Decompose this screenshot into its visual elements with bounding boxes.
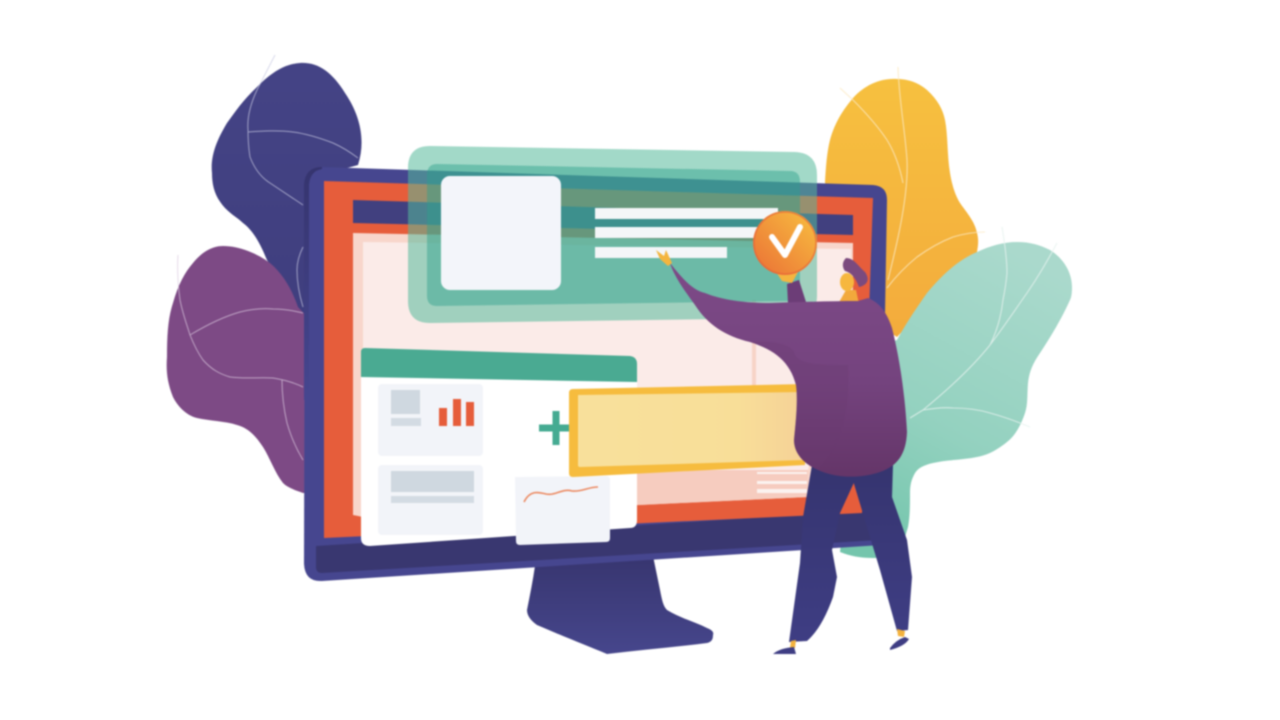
text lines — [595, 208, 778, 258]
navy header bar — [353, 200, 853, 235]
feet — [773, 629, 909, 654]
widget: line chart card — [515, 476, 610, 545]
white content card — [361, 348, 637, 546]
icon: check — [772, 227, 800, 255]
yellow layout block — [569, 384, 805, 477]
hair — [843, 258, 868, 287]
hand holding badge — [776, 272, 798, 283]
right leg — [851, 465, 912, 631]
icon: plus — [539, 411, 570, 445]
left leg — [789, 465, 857, 642]
small white text lines — [757, 472, 807, 493]
screen: red background — [324, 181, 873, 538]
neck — [838, 290, 859, 304]
leaf: purple — [167, 246, 310, 493]
lower pink band — [637, 470, 808, 505]
floating green panel — [408, 146, 817, 323]
widget: bar chart card — [378, 384, 483, 456]
monitor frame — [304, 167, 887, 581]
badge: check mark — [753, 211, 817, 275]
page area pink border — [353, 233, 853, 517]
monitor — [304, 167, 887, 581]
monitor lower bezel — [316, 510, 879, 573]
panel inner — [427, 164, 800, 306]
sweater fold shading — [750, 342, 848, 470]
leaf: navy — [212, 55, 362, 320]
frame shadow edge — [304, 167, 322, 400]
widget: text card — [378, 465, 483, 535]
page area pale pink — [363, 242, 851, 480]
sweater — [670, 263, 907, 477]
raised arm sleeve — [787, 280, 806, 304]
leaf: teal — [840, 227, 1072, 558]
face — [840, 273, 854, 291]
image placeholder — [441, 176, 561, 290]
leaf: yellow — [825, 67, 985, 337]
person — [656, 250, 912, 654]
hand pointing — [656, 250, 672, 266]
monitor stand — [527, 556, 713, 654]
page column rule — [752, 300, 756, 390]
panel outer translucent — [408, 146, 817, 323]
green card header — [361, 348, 637, 382]
